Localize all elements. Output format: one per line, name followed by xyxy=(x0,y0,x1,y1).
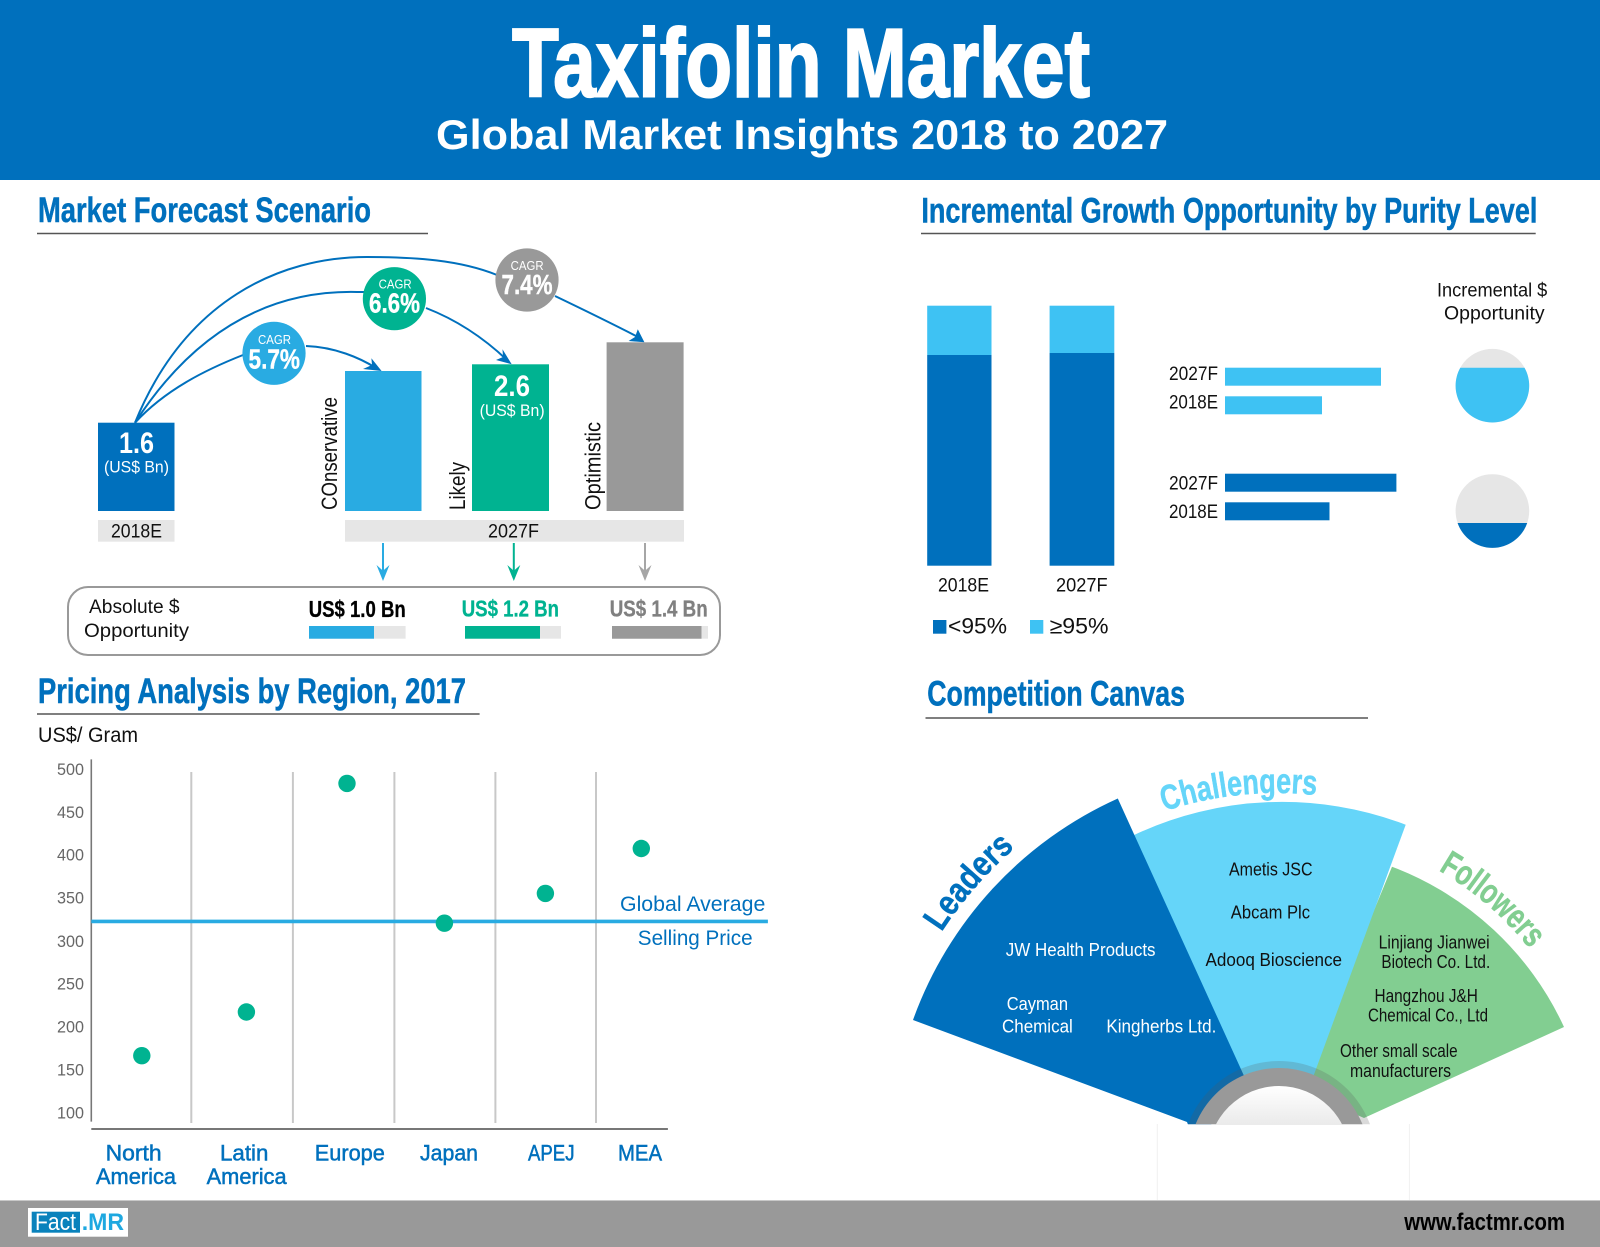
logo: Fact.MR: Fact xyxy=(35,1209,76,1236)
bar: 2018E xyxy=(98,423,174,511)
year label: 2027F xyxy=(345,520,684,543)
year label: 2027F: 2027F xyxy=(488,522,539,543)
followers companies xyxy=(1340,932,1490,1081)
opportunity: optimistic xyxy=(610,596,708,639)
y axis labels: 150 xyxy=(57,1061,84,1080)
segment label: leaders: Leaders xyxy=(922,837,1012,931)
followers companies: Biotech Co. Ltd. xyxy=(1381,952,1490,972)
opportunity: likely xyxy=(462,596,561,639)
challengers companies xyxy=(1206,859,1342,970)
region labels: MEA xyxy=(618,1140,662,1165)
challengers companies: Adooq Bioscience xyxy=(1206,950,1342,970)
gauge: <95% xyxy=(1456,474,1529,548)
horizontal bars: ≥95% xyxy=(1169,364,1381,414)
region labels: North xyxy=(106,1140,162,1165)
leaders companies: Kingherbs Ltd. xyxy=(1106,1016,1216,1036)
bar: optimistic xyxy=(580,342,684,511)
leaders companies: Chemical xyxy=(1002,1016,1073,1036)
footer bar xyxy=(0,1200,1600,1247)
year label: 2018E xyxy=(98,520,174,543)
stacked bar: 2018E: 2018E xyxy=(938,575,989,596)
bar: likely: (US$ Bn) xyxy=(480,401,545,420)
heading: market forecast scenario: Market Forecast Scenario xyxy=(38,191,371,230)
badge: CAGR 6.6% xyxy=(363,267,426,330)
legend: <95% xyxy=(948,613,1007,638)
heading: pricing analysis: Pricing Analysis by Region, 2017 xyxy=(38,672,466,711)
header banner xyxy=(0,0,1600,180)
y axis labels: 100 xyxy=(57,1103,84,1122)
y axis labels: 450 xyxy=(57,803,84,822)
callout: absolute $ opportunity xyxy=(68,587,720,655)
badge: CAGR 6.6%: 6.6% xyxy=(369,287,420,318)
subtitle: Global Market Insights 2018 to 2027 xyxy=(436,111,1168,158)
region labels: APEJ xyxy=(528,1140,574,1165)
segment: followers xyxy=(1300,867,1564,1118)
region labels: Japan xyxy=(420,1140,478,1165)
incremental opportunity label: Opportunity xyxy=(1444,304,1545,324)
badge: CAGR 5.7% xyxy=(242,322,306,385)
y axis labels xyxy=(57,760,84,1122)
segment label: followers: Followers xyxy=(1440,850,1542,946)
bar: conservative xyxy=(317,371,422,511)
axis unit: US$/ Gram xyxy=(38,724,138,747)
gauge: ≥95% xyxy=(1456,349,1529,423)
price dots xyxy=(133,775,650,1064)
region labels: Latin xyxy=(220,1140,268,1165)
incremental opportunity label xyxy=(1437,280,1548,324)
bar: likely: Likely xyxy=(445,462,470,510)
followers companies: Linjiang Jianwei xyxy=(1379,932,1490,952)
logo: Fact.MR: .MR xyxy=(82,1209,124,1236)
opportunity: conservative: US$ 1.0 Bn xyxy=(309,596,406,622)
segment label: challengers: Challengers xyxy=(1160,771,1316,810)
y axis labels: 200 xyxy=(57,1018,84,1036)
y axis labels: 500 xyxy=(57,760,84,779)
bar: likely xyxy=(445,364,549,511)
heading: competition canvas: Competition Canvas xyxy=(927,675,1185,714)
horizontal bars: <95%: 2027F xyxy=(1169,474,1218,495)
opportunity: optimistic: US$ 1.4 Bn xyxy=(610,596,708,622)
horizontal bars: ≥95%: 2018E xyxy=(1169,392,1218,413)
followers companies: Other small scale xyxy=(1340,1041,1458,1061)
opportunity: likely: US$ 1.2 Bn xyxy=(462,596,559,622)
opportunity: conservative xyxy=(309,596,406,639)
region labels: America xyxy=(96,1164,177,1189)
panel: pricing analysis xyxy=(37,672,768,1189)
incremental opportunity label: Incremental $ xyxy=(1437,280,1548,301)
arrow: conservative down xyxy=(376,543,390,581)
hub xyxy=(1188,1061,1370,1124)
bar: 2018E: (US$ Bn) xyxy=(104,458,169,477)
bar: 2018E: 1.6 xyxy=(119,427,154,460)
callout: absolute $ opportunity: Opportunity xyxy=(84,621,190,642)
global average selling price line xyxy=(91,893,768,950)
bar: conservative: COnservative xyxy=(317,397,342,510)
followers companies: Hangzhou J&H xyxy=(1374,986,1478,1006)
horizontal bars: <95% xyxy=(1169,474,1396,523)
badge: CAGR 6.6%: CAGR xyxy=(379,276,412,292)
callout: absolute $ opportunity: Absolute $ xyxy=(89,597,180,618)
region labels: Europe xyxy=(315,1140,385,1165)
title: Taxifolin Market xyxy=(512,8,1090,118)
badge: CAGR 5.7%: 5.7% xyxy=(248,344,300,375)
legend: ≥95% xyxy=(1050,613,1108,638)
badge: CAGR 7.4%: 7.4% xyxy=(502,269,553,300)
horizontal bars: ≥95%: 2027F xyxy=(1169,364,1218,385)
segment: leaders xyxy=(913,798,1255,1135)
arrow: optimistic down xyxy=(638,543,652,581)
stacked bar: 2027F: 2027F xyxy=(1056,575,1108,596)
leaders companies xyxy=(1002,940,1216,1036)
badge: CAGR 7.4%: CAGR xyxy=(511,258,544,273)
bar: optimistic: Optimistic xyxy=(580,422,606,510)
stacked bar: 2018E xyxy=(927,306,992,596)
region labels: America xyxy=(207,1164,287,1189)
global average selling price line: Global Average xyxy=(620,893,765,916)
bar: likely: 2.6 xyxy=(494,370,530,403)
panel: market forecast scenario xyxy=(37,191,720,655)
y axis labels: 350 xyxy=(57,889,84,908)
growth arcs with arrowheads xyxy=(135,257,644,423)
logo: Fact.MR xyxy=(28,1208,128,1237)
leaders companies: JW Health Products xyxy=(1006,940,1156,960)
arrow: likely down xyxy=(507,543,520,581)
panel: competition canvas xyxy=(913,675,1564,1200)
region labels xyxy=(96,1140,662,1189)
badge: CAGR 7.4% xyxy=(495,248,559,312)
legend xyxy=(933,613,1108,638)
followers companies: Chemical Co., Ltd xyxy=(1368,1006,1488,1026)
challengers companies: Abcam Plc xyxy=(1231,902,1310,922)
global average selling price line: Selling Price xyxy=(638,927,753,950)
horizontal bars: <95%: 2018E xyxy=(1169,502,1218,523)
fan chart xyxy=(913,798,1564,1124)
y axis labels: 250 xyxy=(57,974,84,994)
leaders companies: Cayman xyxy=(1007,994,1068,1014)
website url: www.factmr.com xyxy=(1403,1209,1565,1236)
followers companies: manufacturers xyxy=(1350,1061,1451,1081)
year label: 2018E: 2018E xyxy=(111,522,162,543)
y axis labels: 400 xyxy=(57,846,84,865)
challengers companies: Ametis JSC xyxy=(1229,859,1312,879)
segment: challengers xyxy=(1133,802,1406,1085)
y axis labels: 300 xyxy=(57,932,84,951)
badge: CAGR 5.7%: CAGR xyxy=(258,332,291,347)
stacked bar: 2027F xyxy=(1050,306,1114,596)
panel: incremental growth opportunity xyxy=(921,191,1548,638)
